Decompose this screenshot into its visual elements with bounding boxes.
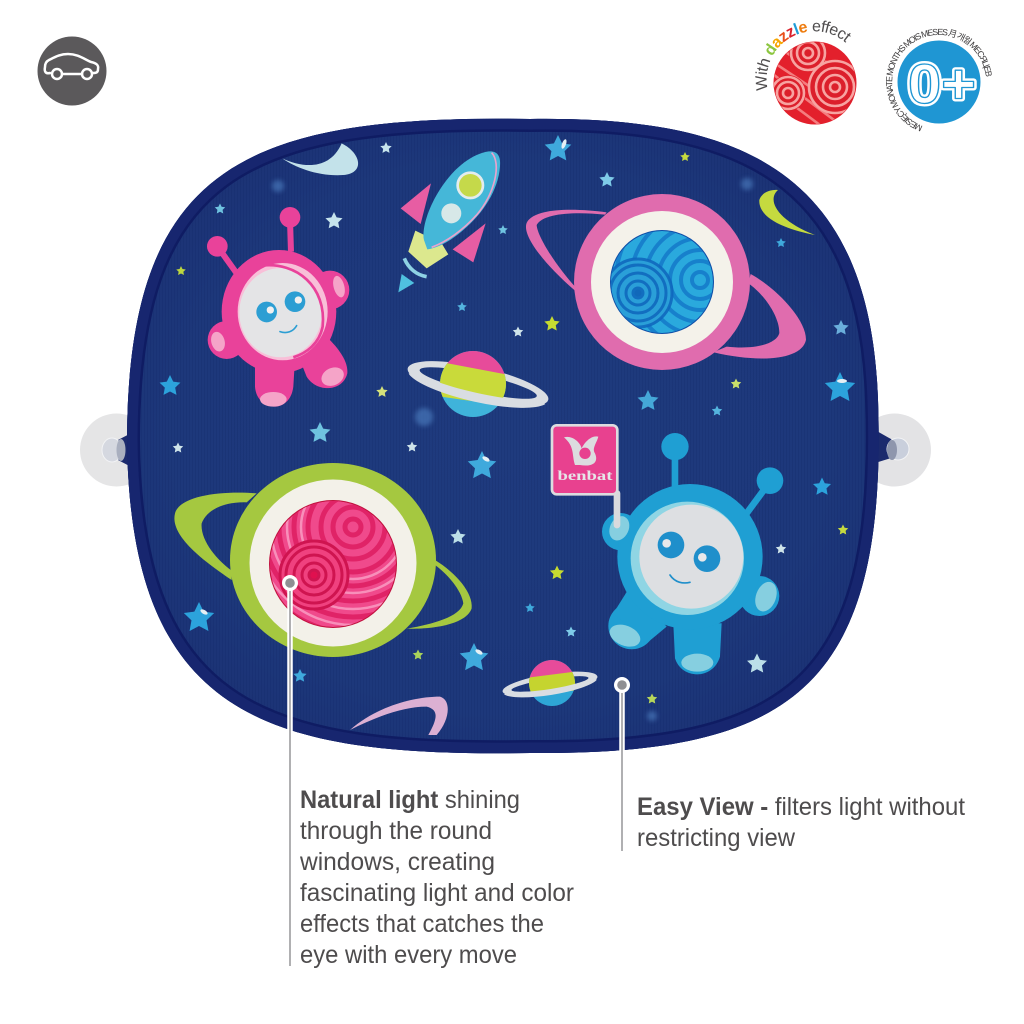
text: natural light: eye with every move (300, 941, 517, 969)
text: natural light (299, 786, 574, 969)
icon: car in grey circle (38, 36, 106, 106)
text: natural light: through the round (300, 817, 492, 845)
moon: pink (350, 697, 448, 735)
callout line: easy view (614, 677, 630, 851)
text: natural light: effects that catches the (300, 910, 544, 938)
callout line: natural light (282, 575, 298, 966)
flag: benbat logo: benbat (557, 468, 613, 483)
green planet with red window (174, 463, 472, 657)
text: easy view (637, 793, 965, 852)
badge: age 0+ months: MESIĘCY MONATE MONTHS MOIS MESES 月 개월 МЕСЯЦЕВ (886, 28, 992, 132)
pink planet with blue window (526, 194, 806, 370)
moon: lime (759, 190, 815, 235)
badge: age 0+ months: 0+ (908, 52, 976, 115)
text: natural light: Natural light shining (300, 786, 520, 814)
suction cup: left (80, 414, 153, 486)
text: easy view: Easy View - filters light without (637, 793, 965, 821)
text: natural light: fascinating light and color (300, 879, 574, 907)
saturn: centre planet (408, 351, 548, 417)
flag pole (607, 493, 627, 525)
blurred light spots (272, 178, 753, 721)
badge: age 0+ months: 0+ (908, 52, 976, 115)
planet ring (526, 210, 806, 359)
text: easy view: restricting view (637, 824, 796, 852)
saturn: small planet (502, 660, 598, 706)
blue alien with benbat flag (552, 425, 783, 674)
blue dazzle lens (611, 231, 713, 333)
stars (160, 135, 855, 703)
red dazzle lens (270, 501, 396, 627)
planet ring (174, 493, 472, 629)
badge: with dazzle effect (755, 20, 856, 124)
pink alien (207, 207, 349, 407)
badge: with dazzle effect: With dazzle effect (755, 20, 851, 91)
panel: sun shade fabric (127, 119, 879, 753)
suction cup: right (858, 414, 931, 486)
flag: benbat logo (552, 425, 617, 494)
text: natural light: windows, creating (299, 848, 495, 876)
rocket (398, 151, 500, 292)
moons (282, 143, 358, 175)
